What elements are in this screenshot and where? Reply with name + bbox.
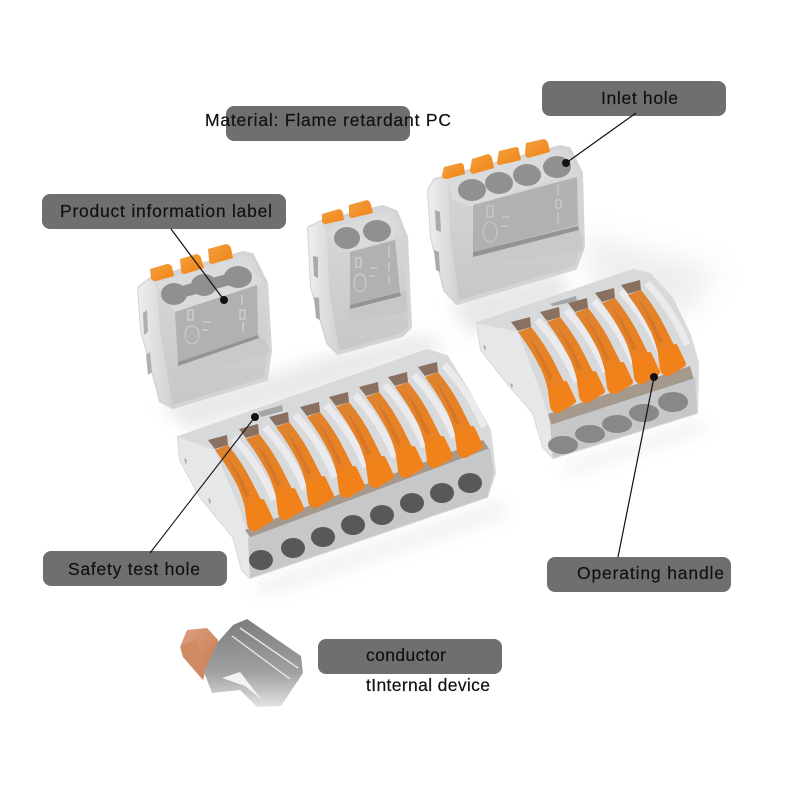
label: conductor xyxy=(318,639,502,674)
orange tabs xyxy=(442,139,550,179)
label: Product information label xyxy=(42,194,286,229)
label: Operating handle xyxy=(547,557,731,592)
side pips xyxy=(483,345,513,389)
copper spring xyxy=(180,628,218,680)
leader line: safety test hole xyxy=(150,413,259,553)
side slots xyxy=(143,310,152,375)
leader line: inlet hole xyxy=(562,113,636,167)
label: Safety test hole xyxy=(43,551,227,586)
side pips xyxy=(184,458,211,505)
label: conductor: conductor xyxy=(366,645,446,665)
label: Material xyxy=(205,106,451,141)
connector: 8-way lever xyxy=(178,350,495,578)
label: Inlet hole: Inlet hole xyxy=(601,88,678,108)
label: Inlet hole xyxy=(542,81,726,116)
orange tabs xyxy=(322,200,373,224)
connector: 4-way xyxy=(428,139,583,304)
orange tabs xyxy=(150,244,233,281)
orange handles xyxy=(511,280,687,412)
recessed information panel xyxy=(348,240,408,322)
leader line: operating handle xyxy=(618,373,658,557)
label: Product information label: Product information label xyxy=(60,201,272,221)
handle recess xyxy=(548,366,694,428)
caption: internal device: tInternal device xyxy=(366,675,490,695)
front lip and wire holes xyxy=(248,448,494,578)
wire holes xyxy=(161,266,252,305)
connector: 5-way lever xyxy=(477,270,698,458)
internal conductor part xyxy=(180,619,303,707)
background shadows xyxy=(160,235,720,595)
wire holes xyxy=(458,156,571,201)
label: Material: Material: Flame retardant PC xyxy=(205,110,451,130)
front lip and wire holes xyxy=(548,378,697,458)
recessed information panel xyxy=(175,285,270,383)
orange handles xyxy=(208,362,484,530)
leader line: product information label xyxy=(171,229,228,304)
label: Safety test hole: Safety test hole xyxy=(68,559,200,579)
connector: 2-way xyxy=(308,200,410,354)
side slots xyxy=(434,210,441,272)
test slot xyxy=(550,296,577,306)
silver clamp xyxy=(204,619,303,707)
label: Operating handle: Operating handle xyxy=(577,563,724,583)
recessed information panel xyxy=(470,177,583,267)
connector: 3-way xyxy=(138,244,270,408)
side slots xyxy=(313,256,320,320)
wire hole xyxy=(334,220,391,249)
handle recess xyxy=(245,440,490,540)
test slot xyxy=(258,405,283,417)
